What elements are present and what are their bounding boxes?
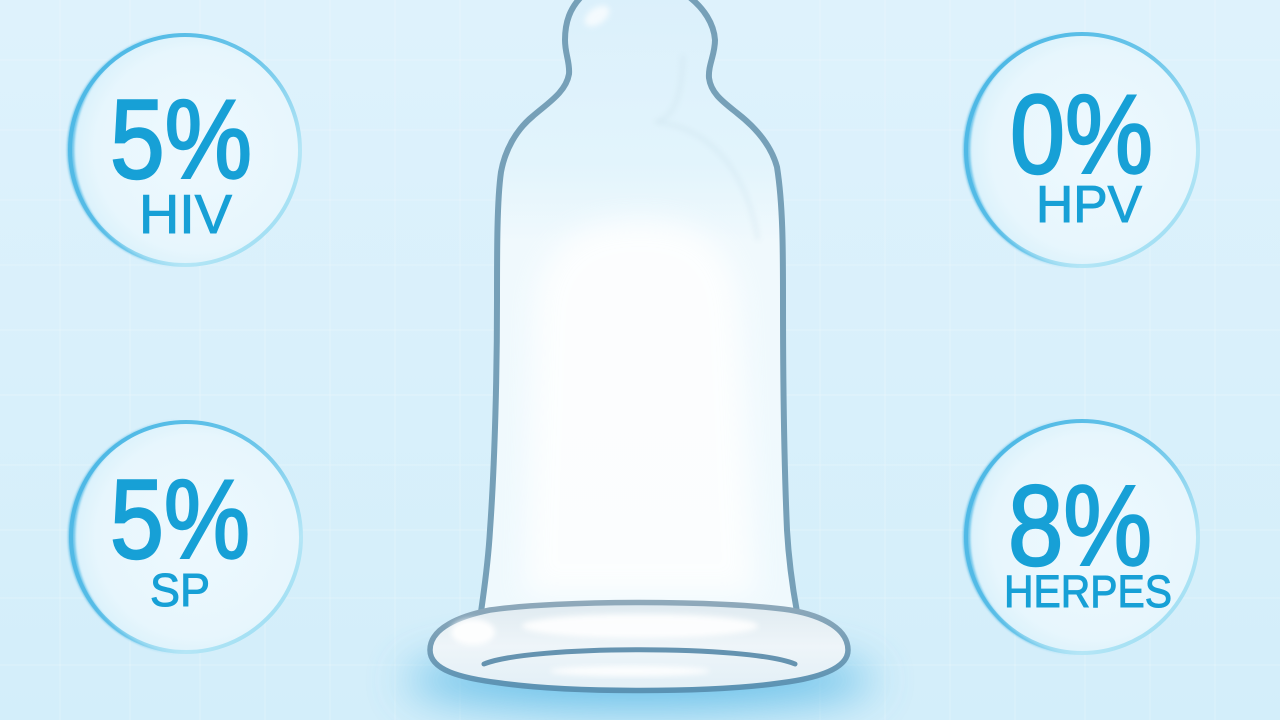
label: HIV	[139, 183, 232, 245]
highlight: tip	[581, 1, 613, 31]
bubble: SP 5%	[68, 420, 301, 654]
value: 5%	[110, 77, 252, 202]
value: 5%	[110, 457, 250, 582]
inner fold lines	[655, 55, 758, 240]
shadow under rim	[405, 650, 875, 710]
body	[481, 0, 797, 612]
body outline	[481, 0, 797, 612]
value: 0%	[1010, 72, 1153, 197]
label: HPV	[1036, 176, 1142, 234]
rim inner line	[484, 650, 795, 664]
condom illustration	[405, 0, 875, 710]
rim	[430, 602, 848, 690]
bubble: HERPES 8%	[963, 419, 1198, 655]
rim highlights	[522, 614, 758, 638]
highlight: central sheen	[525, 220, 755, 595]
label: SP	[150, 564, 210, 616]
value: 8%	[1008, 463, 1152, 590]
label: HERPES	[1004, 566, 1172, 617]
bubble: HIV 5%	[67, 33, 300, 267]
bubble: HPV 0%	[963, 32, 1198, 268]
